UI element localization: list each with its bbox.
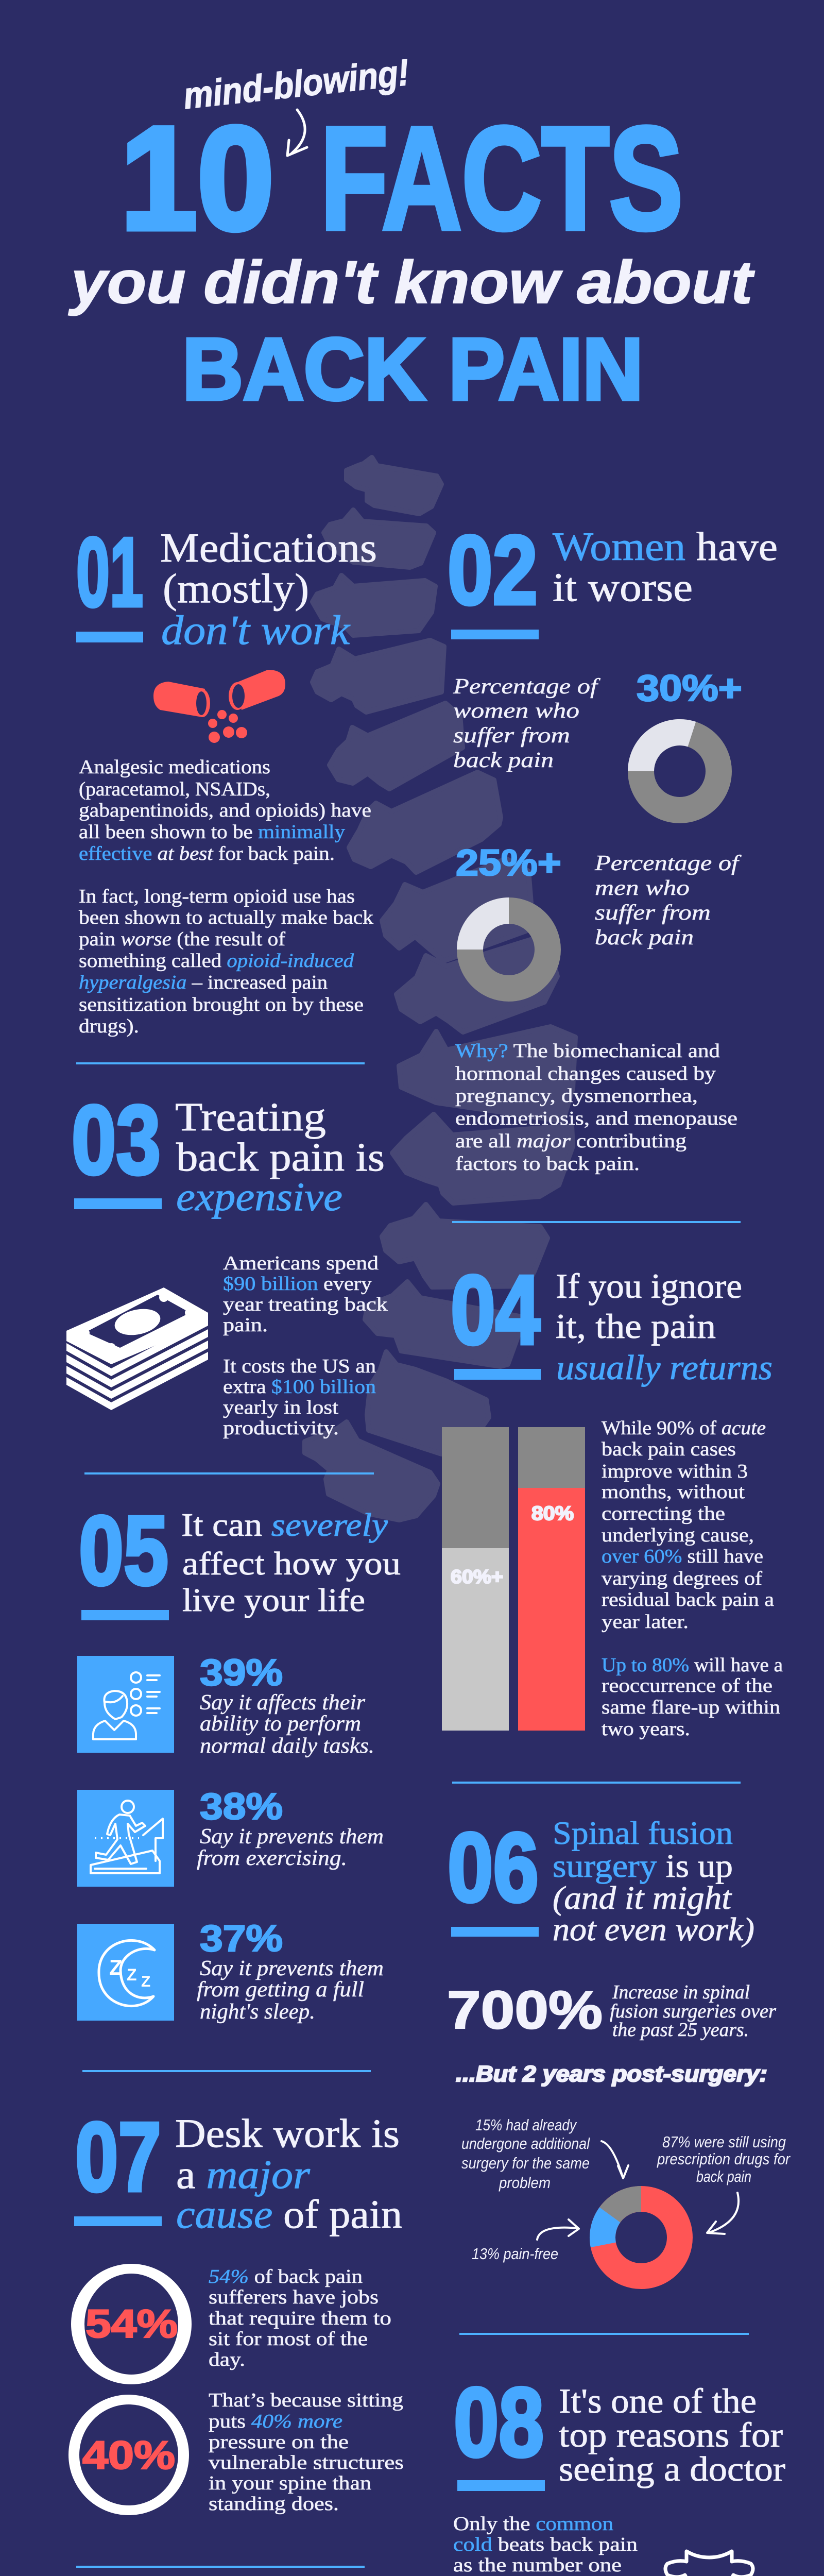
- body text: sensitization brought on by these: [79, 994, 364, 1015]
- icon: open capsule with pills: [153, 670, 285, 743]
- body text: Americans spend: [223, 1252, 379, 1274]
- FACTS: FACTS: [320, 97, 683, 260]
- body text: [453, 2513, 638, 2576]
- accent bar: [76, 632, 143, 642]
- body text: as the number one: [453, 2554, 622, 2576]
- heading: Medications: [160, 524, 377, 571]
- body text: productivity.: [223, 1417, 339, 1439]
- heading: (and it might: [553, 1880, 732, 1916]
- arrow: from tag to facts: [287, 110, 307, 156]
- mind-blowing tag: mind-blowing!: [181, 52, 411, 117]
- accent bar: [74, 2216, 162, 2226]
- heading: expensive: [176, 1174, 342, 1219]
- body text: varying degrees of: [602, 1568, 762, 1589]
- icon: person with checklist: [77, 1656, 174, 1753]
- caption 700%: [610, 1981, 776, 2041]
- body text: vulnerable structures: [209, 2452, 404, 2473]
- donut callouts: surgery for the same: [461, 2154, 590, 2172]
- number 07: 07: [75, 2103, 161, 2212]
- caption 37%: from getting a full: [197, 1978, 364, 2002]
- heading: usually returns: [556, 1348, 772, 1387]
- icon: person on treadmill: [77, 1790, 174, 1887]
- body text: over 60% still have: [602, 1546, 763, 1567]
- caption: men: back pain: [595, 926, 694, 950]
- caption 39%: ability to perform: [200, 1712, 361, 1736]
- heading: It's one of the: [559, 2381, 757, 2420]
- heading: surgery is up: [553, 1848, 733, 1884]
- accent bar: [451, 630, 539, 639]
- subheading: ...But 2 years post-surgery:: [456, 2061, 767, 2087]
- caption 39%: normal daily tasks.: [200, 1734, 374, 1758]
- number 05: 05: [79, 1496, 168, 1605]
- why text: factors to back pain.: [455, 1153, 640, 1175]
- donut chart: women 30%: [628, 719, 719, 810]
- heading: a major: [176, 2152, 311, 2197]
- heading: [553, 524, 778, 609]
- stat badge 54%: [71, 2264, 192, 2384]
- body text: drugs).: [79, 1015, 139, 1037]
- body text: day.: [209, 2349, 245, 2370]
- panel: fact 07 desk work: [68, 2103, 404, 2515]
- heading: Spinal fusion: [553, 1815, 733, 1851]
- caption 37%: [197, 1957, 384, 2024]
- heading: (mostly): [163, 565, 309, 612]
- donut callouts: [461, 2116, 791, 2263]
- body text: pressure on the: [209, 2431, 349, 2453]
- stat badge 54%: 54%: [85, 2302, 178, 2346]
- caption: men: suffer from: [595, 901, 711, 925]
- heading: [556, 1266, 772, 1387]
- body text: sufferers have jobs: [209, 2286, 379, 2308]
- caption 700%: fusion surgeries over: [610, 2001, 776, 2022]
- body text: gabapentinoids, and opioids) have: [79, 800, 371, 821]
- stat 30%+: 30%+: [637, 668, 742, 709]
- why text: pregnancy, dysmenorrhea,: [455, 1085, 698, 1107]
- icon: moon with zzz: Z: [127, 1965, 137, 1984]
- 10: 10: [121, 97, 274, 260]
- caption 38%: [197, 1825, 384, 1870]
- body text: year later.: [602, 1611, 689, 1633]
- stat 38%: 38%: [200, 1786, 283, 1827]
- panel: fact 04 returns: [442, 1256, 783, 1740]
- heading: it, the pain: [556, 1307, 716, 1346]
- heading: If you ignore: [556, 1266, 742, 1306]
- heading: back pain is: [176, 1134, 385, 1179]
- heading: [559, 2381, 785, 2488]
- heading: [181, 1506, 401, 1618]
- body text: same flare-up within: [602, 1697, 780, 1718]
- body text: standing does.: [209, 2493, 339, 2515]
- body text: sit for most of the: [209, 2328, 368, 2350]
- body text: [209, 2266, 404, 2515]
- body text: pain.: [223, 1314, 268, 1336]
- body text: in your spine than: [209, 2472, 371, 2494]
- heading: [160, 524, 377, 653]
- heading: Treating: [175, 1094, 326, 1139]
- background spine illustration: [305, 457, 575, 1520]
- caption 38%: from exercising.: [197, 1846, 347, 1870]
- heading: It can severely: [181, 1506, 388, 1543]
- panel: fact 01 medications: [76, 518, 377, 1037]
- caption 39%: [200, 1691, 374, 1758]
- icon: vertebrae: [665, 2551, 753, 2576]
- body text: Only the common: [453, 2513, 613, 2535]
- why text: [455, 1040, 737, 1175]
- caption: women: [453, 675, 600, 772]
- body text: been shown to actually make back: [79, 907, 373, 928]
- why text: are all major contributing: [455, 1130, 686, 1152]
- icon: stack of money: [66, 1287, 208, 1410]
- heading: Women have: [553, 524, 778, 569]
- bar chart: 60%+ residual, 80% recurrence: [442, 1427, 585, 1731]
- body text: hyperalgesia – increased pain: [79, 972, 328, 993]
- bar chart: 60%+ residual, 80% recurrence: 80%: [531, 1503, 574, 1524]
- caption 37%: night's sleep.: [200, 2000, 315, 2024]
- arrow: to grey segment: [602, 2141, 628, 2178]
- number 04: 04: [451, 1256, 540, 1365]
- panel: fact 03 expensive: [66, 1086, 388, 1439]
- why text: hormonal changes caused by: [455, 1063, 716, 1084]
- body text: cold beats back pain: [453, 2534, 638, 2555]
- heading: live your life: [182, 1582, 365, 1618]
- body text: correcting the: [602, 1503, 725, 1524]
- body text: [602, 1417, 783, 1740]
- caption: women: women who: [453, 699, 579, 723]
- why text: Why? The biomechanical and: [455, 1040, 720, 1062]
- caption 700%: Increase in spinal: [612, 1981, 750, 2003]
- body text: residual back pain a: [602, 1589, 774, 1611]
- BACK PAIN: BACK PAIN: [182, 320, 643, 418]
- donut callouts: back pain: [696, 2167, 751, 2185]
- body text: reoccurrence of the: [602, 1675, 772, 1697]
- heading: top reasons for: [559, 2415, 783, 2454]
- number 02: 02: [448, 516, 538, 625]
- caption: women: Percentage of: [453, 675, 600, 699]
- heading: [175, 2111, 402, 2236]
- heading: not even work): [553, 1911, 754, 1947]
- body text: puts 40% more: [209, 2411, 342, 2432]
- number 01: 01: [76, 518, 143, 627]
- body text: Up to 80% will have a: [602, 1654, 783, 1676]
- body text: underlying cause,: [602, 1524, 754, 1546]
- panel: fact 08 doctor: [453, 2368, 785, 2576]
- donut callouts: 15% had already: [475, 2116, 577, 2134]
- you didn't know about: you didn't know about: [68, 248, 754, 316]
- body text: yearly in lost: [223, 1397, 338, 1418]
- stat badge 40%: 40%: [82, 2433, 175, 2478]
- body text: two years.: [602, 1718, 690, 1740]
- donut callouts: 87% were still using: [662, 2133, 786, 2151]
- body text: all been shown to be minimally: [79, 821, 345, 843]
- icon: moon with zzz: Z: [141, 1973, 150, 1990]
- caption 700%: the past 25 years.: [612, 2019, 749, 2041]
- heading: [175, 1094, 385, 1219]
- donut callouts: undergone additional: [461, 2134, 590, 2153]
- caption: women: back pain: [453, 749, 554, 772]
- accent bar: [451, 1927, 539, 1937]
- body text: $90 billion every: [223, 1273, 372, 1295]
- body text: It costs the US an: [223, 1355, 376, 1377]
- heading: don't work: [161, 607, 351, 653]
- panel: fact 06 spinal fusion: [447, 1813, 791, 2276]
- caption 38%: Say it prevents them: [200, 1825, 384, 1849]
- donut callouts: prescription drugs for: [657, 2150, 791, 2168]
- heading: it worse: [553, 565, 693, 609]
- number 08: 08: [454, 2368, 544, 2477]
- caption 37%: Say it prevents them: [200, 1957, 384, 1980]
- stat badge 40%: [68, 2395, 189, 2515]
- heading: [553, 1815, 754, 1947]
- heading: seeing a doctor: [559, 2449, 785, 2488]
- caption 39%: Say it affects their: [200, 1691, 366, 1715]
- stat 700%: 700%: [447, 1980, 603, 2040]
- body text: 54% of back pain: [209, 2266, 363, 2287]
- body text: extra $100 billion: [223, 1376, 376, 1398]
- body text: That’s because sitting: [209, 2389, 403, 2411]
- caption: women: suffer from: [453, 724, 570, 748]
- body text: In fact, long-term opioid use has: [79, 886, 355, 907]
- donut chart: outcomes: [590, 2186, 680, 2276]
- body text: improve within 3: [602, 1461, 748, 1482]
- body text: (paracetamol, NSAIDs,: [79, 778, 270, 800]
- heading: affect how you: [182, 1545, 401, 1582]
- body text: back pain cases: [602, 1438, 736, 1460]
- caption: men: [594, 852, 742, 950]
- accent bar: [457, 2480, 545, 2491]
- body text: effective at best for back pain.: [79, 843, 335, 865]
- accent bar: [454, 1369, 541, 1380]
- panel: fact 05 daily life: [77, 1496, 401, 2024]
- body text: months, without: [602, 1481, 745, 1503]
- number 06: 06: [448, 1813, 539, 1922]
- accent bar: [74, 1198, 162, 1209]
- stat 39%: 39%: [200, 1652, 283, 1693]
- body text: that require them to: [209, 2308, 391, 2329]
- body text: [223, 1252, 388, 1439]
- body text: Analgesic medications: [79, 756, 270, 778]
- bar chart: 60%+ residual, 80% recurrence: 60%+: [451, 1566, 503, 1587]
- body text: pain worse (the result of: [79, 928, 285, 950]
- accent bar: [81, 1610, 169, 1620]
- body text: [79, 756, 373, 1037]
- icon: moon with zzz: [77, 1924, 174, 2021]
- heading: Desk work is: [175, 2111, 400, 2156]
- body text: year treating back: [223, 1294, 388, 1315]
- stat 25%+: 25%+: [456, 843, 561, 884]
- body text: something called opioid-induced: [79, 950, 354, 972]
- arrow: to blue segment: [537, 2219, 579, 2240]
- icon: moon with zzz: Z: [109, 1955, 123, 1979]
- donut callouts: 13% pain-free: [472, 2245, 558, 2263]
- caption: men: Percentage of: [594, 852, 742, 875]
- body text: While 90% of acute: [602, 1417, 766, 1439]
- heading: cause of pain: [176, 2192, 402, 2236]
- caption: men: men who: [595, 876, 690, 900]
- arrow: to red segment: [707, 2193, 739, 2234]
- number 03: 03: [72, 1086, 161, 1195]
- donut chart: men 25%: [457, 897, 548, 988]
- stat 37%: 37%: [200, 1918, 283, 1959]
- title: [68, 52, 754, 418]
- donut callouts: problem: [499, 2174, 551, 2192]
- why text: endometriosis, and menopause: [455, 1108, 737, 1129]
- panel: fact 02 women: [448, 516, 778, 1175]
